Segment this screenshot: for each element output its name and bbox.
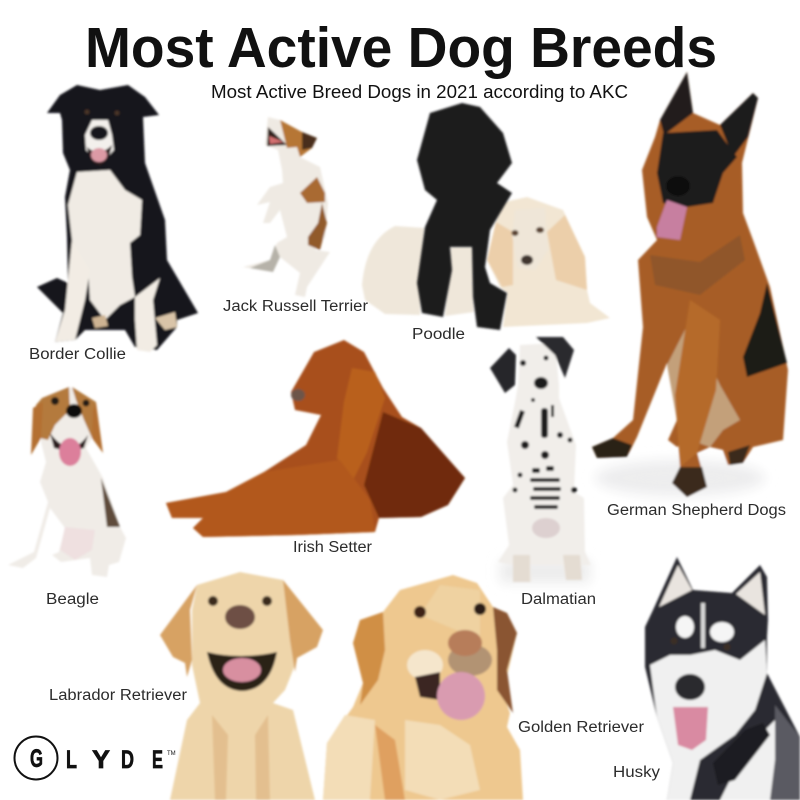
logo: glyde: G (30, 745, 43, 773)
dog: border collie (37, 85, 198, 352)
dog: black poodle (417, 103, 512, 330)
dog: irish setter (166, 340, 465, 537)
label: irish setter: Irish Setter (293, 539, 372, 556)
label: beagle: Beagle (46, 591, 99, 608)
dog: cream poodle (487, 197, 610, 327)
label: border collie: Border Collie (29, 346, 126, 363)
dog: golden retriever (323, 575, 523, 800)
title: Most Active Dog Breeds (85, 16, 717, 80)
logo: glyde: Y (92, 746, 110, 774)
dog: beagle (8, 387, 126, 577)
label: husky: Husky (613, 764, 660, 781)
dog: labrador retriever (160, 572, 323, 800)
dog: husky (645, 557, 800, 800)
logo: glyde: TM (167, 751, 176, 757)
subtitle: Most Active Breed Dogs in 2021 according to AKC (211, 81, 628, 102)
label: german shepherd dogs: German Shepherd Dogs (607, 502, 786, 519)
dog: german shepherd (592, 72, 788, 497)
label: labrador retriever: Labrador Retriever (49, 687, 187, 704)
dog: jack russell terrier (243, 117, 330, 297)
logo: glyde: D (121, 746, 134, 774)
logo: glyde: L (66, 746, 77, 774)
dog: dalmatian (490, 337, 591, 583)
label: poodle: Poodle (412, 326, 465, 343)
label: jack russell terrier: Jack Russell Terrier (223, 298, 368, 315)
logo: glyde (14, 736, 176, 780)
label: dalmatian: Dalmatian (521, 591, 596, 608)
logo: glyde: E (152, 746, 163, 774)
label: golden retriever: Golden Retriever (518, 719, 644, 736)
dog: white poodle behind (362, 226, 474, 316)
